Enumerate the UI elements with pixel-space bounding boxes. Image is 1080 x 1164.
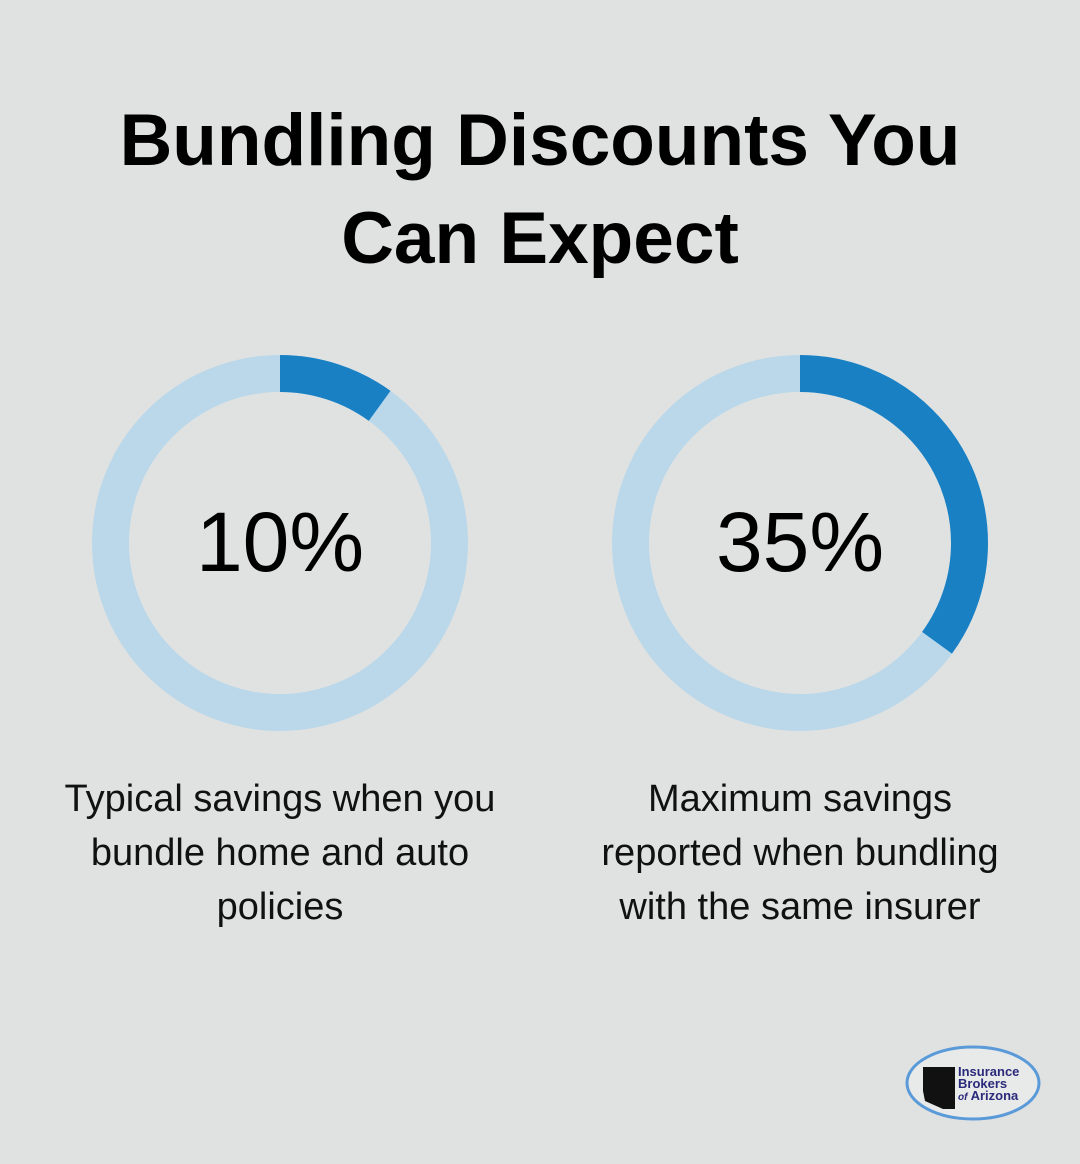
donut chart: 10%: 10% (196, 495, 364, 589)
label: maximum savings: with the same insurer (619, 886, 981, 928)
label: maximum savings: Maximum savings (648, 778, 952, 820)
logo (906, 1046, 1040, 1120)
label: typical savings: bundle home and auto (91, 832, 469, 874)
logo: Brokers (958, 1076, 1007, 1091)
donut chart: 10% (92, 355, 468, 731)
label: typical savings: Typical savings when you (65, 778, 495, 820)
logo: of Arizona (958, 1088, 1019, 1103)
label: maximum savings (601, 778, 999, 928)
title: Can Expect (341, 198, 739, 279)
title: Bundling Discounts You (120, 100, 960, 181)
donut chart: 35%: 35% (716, 495, 884, 589)
label: maximum savings: reported when bundling (601, 832, 999, 874)
label: typical savings (65, 778, 495, 928)
label: typical savings: policies (217, 886, 343, 928)
logo: Insurance (958, 1064, 1019, 1079)
donut chart: 35% (612, 355, 988, 731)
title (120, 100, 960, 279)
